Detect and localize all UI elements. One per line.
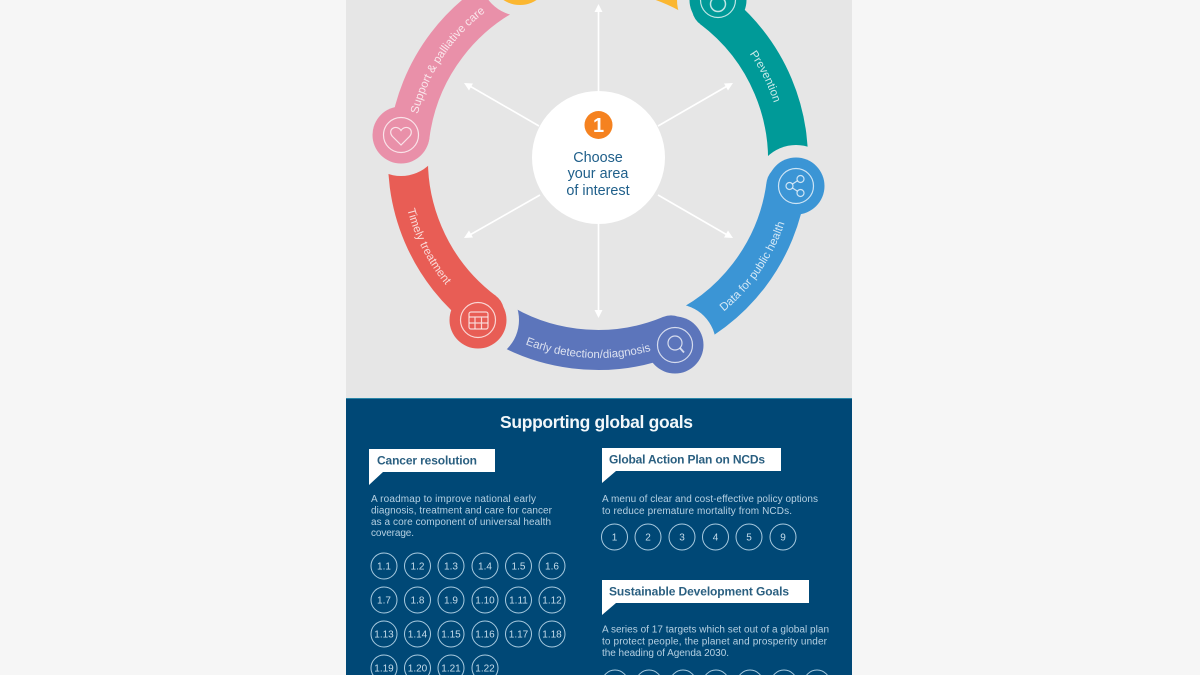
icon: heart bbox=[384, 118, 418, 152]
targets: cancer resolution: 1.13 bbox=[374, 630, 394, 640]
label: data for public health: Data for public health bbox=[719, 222, 784, 311]
targets: cancer resolution: 1.3 bbox=[444, 562, 458, 572]
targets: sustainable development goals bbox=[602, 670, 830, 675]
targets: global action plan: 1 bbox=[612, 532, 618, 544]
targets: cancer resolution: 1.6 bbox=[545, 562, 559, 572]
text: choose your area of interest: your area bbox=[568, 166, 628, 182]
segment: early detection/diagnosis bbox=[437, 279, 704, 374]
targets: cancer resolution: 1.14 bbox=[408, 630, 428, 640]
targets: cancer resolution: 1.4 bbox=[478, 562, 492, 572]
targets: cancer resolution: 1.19 bbox=[374, 664, 394, 674]
targets: cancer resolution: 1.21 bbox=[441, 664, 461, 674]
segment: prevention bbox=[690, 0, 837, 227]
targets: global action plan bbox=[602, 524, 796, 550]
icon: target bbox=[700, 0, 736, 18]
targets: cancer resolution: 1.17 bbox=[509, 630, 529, 640]
segment: yellow band bbox=[525, 0, 759, 41]
targets: cancer resolution: 1.7 bbox=[377, 596, 391, 606]
text: cancer resolution description: coverage. bbox=[371, 528, 414, 539]
targets: global action plan: 3 bbox=[679, 532, 685, 544]
targets: cancer resolution: 1.1 bbox=[377, 562, 391, 572]
label: timely treatment: Timely treatment bbox=[408, 208, 451, 285]
targets: cancer resolution: 1.16 bbox=[475, 630, 495, 640]
targets: global action plan: 9 bbox=[780, 532, 786, 544]
callout: cancer resolution: Cancer resolution bbox=[377, 454, 477, 468]
segment: yellow disc bbox=[490, 0, 550, 5]
badge: step number: 1 bbox=[593, 115, 604, 137]
targets: cancer resolution: 1.18 bbox=[542, 630, 562, 640]
callout: sustainable development goals: Sustainable Development Goals bbox=[609, 584, 789, 598]
targets: global action plan: 2 bbox=[645, 532, 651, 544]
arrows: six spokes from the centre bbox=[464, 4, 733, 318]
targets: cancer resolution: 1.10 bbox=[475, 596, 495, 606]
label: prevention: Prevention bbox=[750, 50, 780, 102]
label: early detection/diagnosis: Early detection/diagnosis bbox=[526, 337, 650, 359]
text: global action plan description: A menu of clear and cost-effective policy options bbox=[602, 494, 818, 505]
text: global action plan description: to reduce premature mortality from NCDs. bbox=[602, 506, 792, 517]
targets: cancer resolution: 1.20 bbox=[408, 664, 428, 674]
text: cancer resolution description: as a core component of universal health bbox=[371, 517, 551, 528]
callout: global action plan on NCDs: Global Action Plan on NCDs bbox=[609, 452, 765, 466]
text: global action plan description bbox=[602, 494, 818, 517]
targets: cancer resolution: 1.8 bbox=[411, 596, 425, 606]
callout: cancer resolution bbox=[369, 449, 495, 485]
targets: cancer resolution: 1.5 bbox=[512, 562, 526, 572]
text: cancer resolution description: diagnosis, treatment and care for cancer bbox=[371, 506, 553, 516]
targets: global action plan: 5 bbox=[746, 532, 752, 544]
icon: share bbox=[778, 168, 814, 204]
targets: cancer resolution: 1.11 bbox=[509, 596, 528, 606]
text: choose your area of interest: Choose bbox=[573, 150, 623, 166]
text: cancer resolution description bbox=[371, 494, 553, 539]
callout: sustainable development goals bbox=[602, 580, 809, 615]
text: choose your area of interest: of interest bbox=[566, 183, 630, 199]
panel: circular diagram background bbox=[346, 0, 852, 398]
targets: cancer resolution: 1.15 bbox=[441, 630, 461, 640]
targets: cancer resolution: 1.12 bbox=[542, 596, 562, 606]
icon: magnifier bbox=[658, 328, 692, 362]
icon: calendar bbox=[460, 302, 496, 338]
text: sustainable development goals description: to protect people, the planet and prosperity under bbox=[602, 636, 828, 648]
targets: cancer resolution: 1.22 bbox=[475, 664, 495, 674]
segment: data for public health bbox=[634, 158, 824, 386]
panel: supporting global goals bbox=[346, 399, 852, 675]
text: sustainable development goals description: A series of 17 targets which set out of a global plan bbox=[602, 624, 829, 636]
targets: cancer resolution bbox=[371, 553, 565, 675]
label: support and palliative care: Support & palliative care bbox=[410, 8, 484, 114]
segment: timely treatment bbox=[360, 94, 506, 348]
centre circle bbox=[532, 91, 665, 224]
targets: cancer resolution: 1.9 bbox=[444, 596, 458, 606]
segment: support and palliative care bbox=[372, 0, 562, 164]
callout: global action plan on NCDs bbox=[602, 448, 781, 483]
targets: global action plan: 4 bbox=[713, 532, 719, 544]
text: sustainable development goals description bbox=[602, 624, 829, 659]
text: cancer resolution description: A roadmap to improve national early bbox=[371, 494, 536, 505]
heading: supporting global goals: Supporting global goals bbox=[500, 412, 693, 432]
targets: cancer resolution: 1.2 bbox=[411, 562, 425, 572]
text: sustainable development goals description: the heading of Agenda 2030. bbox=[602, 648, 729, 659]
